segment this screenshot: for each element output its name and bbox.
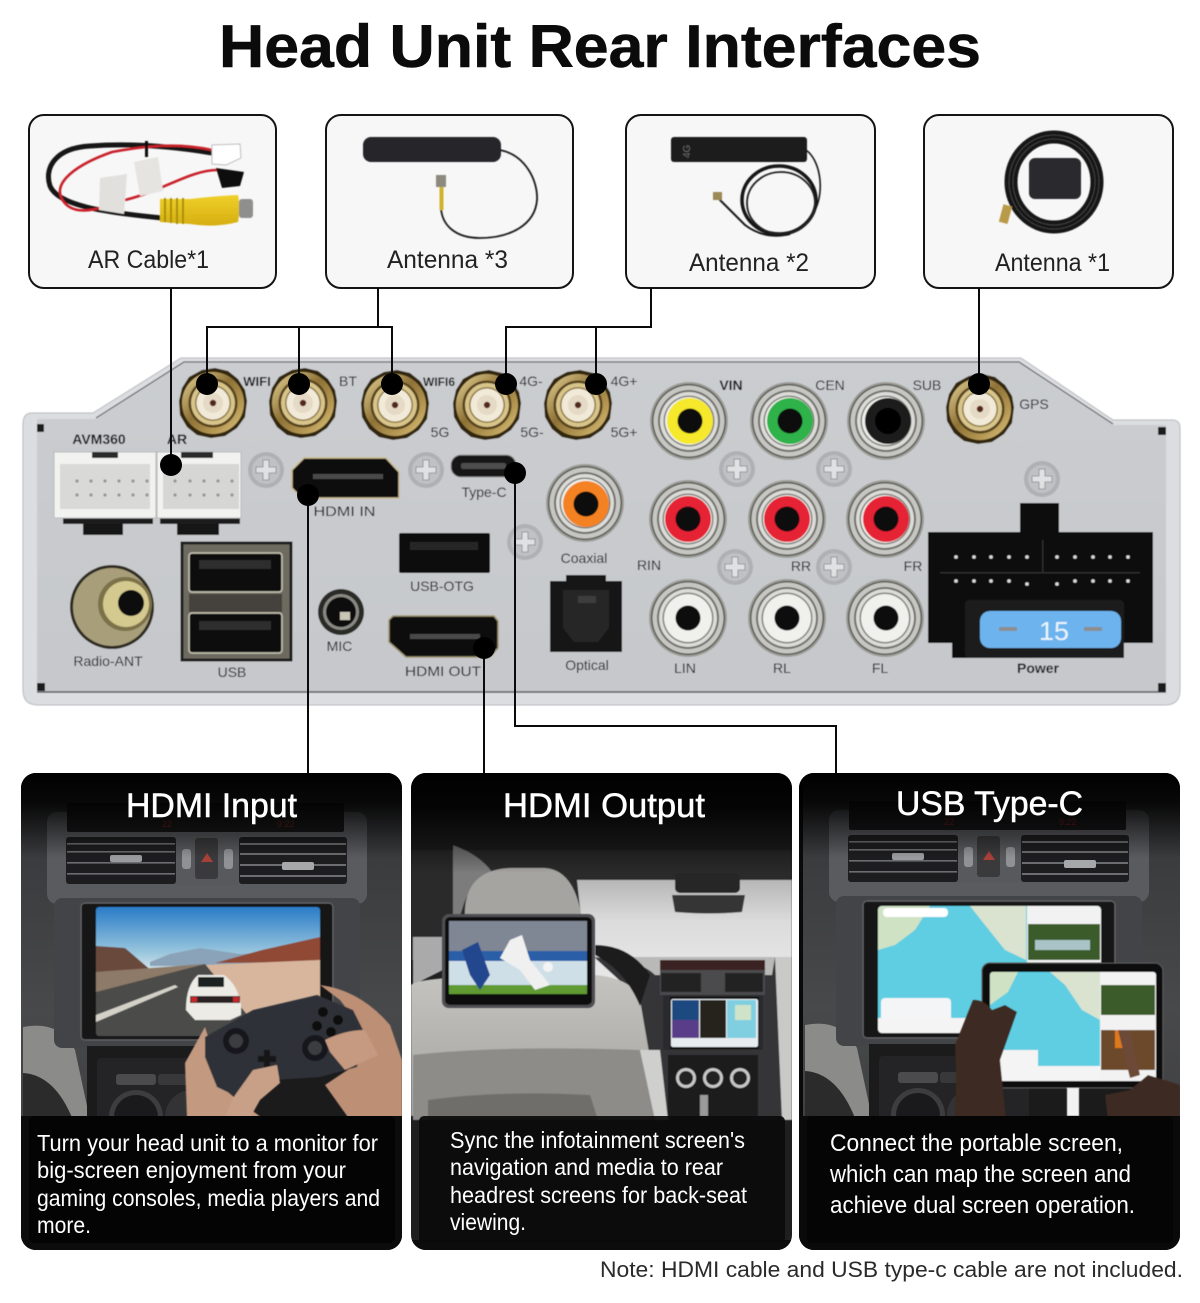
RCA labels: LIN — [674, 660, 696, 676]
port labels top row: WIFI — [243, 374, 271, 389]
RCA labels: FR — [904, 558, 922, 574]
screws — [248, 451, 1060, 585]
caption: Turn your head unit to a monitor for — [37, 1130, 378, 1156]
port labels top row — [72, 373, 1049, 447]
caption: big-screen enjoyment from your — [37, 1157, 346, 1183]
port labels top row: CEN — [815, 377, 845, 393]
head unit screen with map — [863, 901, 1115, 1038]
connection dots — [160, 373, 990, 659]
power connector with fuse: 15 — [1039, 616, 1069, 646]
antenna 2 photo — [671, 137, 820, 236]
HDMI OUT port — [389, 616, 498, 679]
headrest tablet with soccer match — [442, 914, 595, 1008]
caption: which can map the screen and — [829, 1161, 1131, 1188]
port labels top row: VIN — [719, 377, 743, 393]
panel: USB Type-C — [799, 771, 1184, 1250]
card: antenna 3 — [326, 115, 573, 288]
caption — [29, 1116, 395, 1243]
MIC jack — [318, 589, 364, 654]
port labels top row: BT — [339, 373, 357, 389]
antenna 2 label: Antenna *2 — [689, 249, 809, 277]
RCA labels: RL — [773, 660, 791, 676]
line: AR cable to AR port — [170, 288, 172, 465]
antenna 1 label: Antenna *1 — [995, 249, 1110, 277]
RCA labels: RR — [791, 558, 811, 574]
USB Type-C heading: USB Type-C — [896, 785, 1083, 823]
caption: viewing. — [450, 1209, 526, 1235]
HDMI IN port: HDMI IN — [314, 503, 376, 519]
RCA labels: FL — [872, 660, 888, 676]
line: Type-C to panel — [515, 473, 836, 773]
top fade — [799, 773, 1180, 858]
line: antenna 3 to WIFI BT WIFI6 — [207, 288, 392, 384]
card: AR cable — [29, 115, 276, 288]
AVM360 and AR connectors — [54, 452, 241, 535]
port labels top row: AVM360 — [72, 431, 126, 447]
HDMI IN port — [292, 458, 399, 519]
caption: Connect the portable screen, — [830, 1130, 1123, 1157]
line: antenna 1 to GPS — [978, 288, 980, 384]
port labels top row: AR — [167, 431, 187, 447]
Type-C port: Type-C — [461, 484, 507, 500]
head unit screen with racing game — [81, 903, 333, 1040]
port labels top row: GPS — [1019, 396, 1049, 412]
optical port — [550, 575, 622, 673]
caption: more. — [37, 1212, 91, 1238]
connector lines and dots — [160, 288, 990, 773]
USB-OTG port: USB-OTG — [410, 578, 474, 594]
caption: headrest screens for back-seat — [450, 1182, 748, 1208]
port labels top row: 5G- — [520, 424, 544, 440]
note: Note: HDMI cable and USB type-c cable are not included. — [600, 1257, 1183, 1282]
RCA labels — [637, 557, 922, 676]
USB double port: USB — [218, 664, 246, 680]
antenna 3 label: Antenna *3 — [387, 246, 508, 274]
AR cable photo — [48, 141, 253, 226]
AR cable label: AR Cable*1 — [88, 246, 209, 274]
rear-seat car interior — [411, 845, 792, 1120]
caption: gaming consoles, media players and — [37, 1185, 380, 1211]
caption: navigation and media to rear — [450, 1154, 723, 1180]
optical port: Optical — [565, 657, 609, 673]
caption — [807, 1116, 1173, 1243]
HDMI OUT port: HDMI OUT — [405, 663, 481, 679]
power connector with fuse: Power — [1017, 660, 1060, 676]
Radio-ANT socket: Radio-ANT — [73, 653, 143, 669]
port labels top row: 4G- — [519, 373, 543, 389]
caption — [419, 1116, 785, 1243]
antenna 2 photo: 4G — [682, 144, 693, 158]
port labels top row: 5G — [431, 424, 449, 440]
GPS antenna photo — [999, 135, 1099, 229]
chassis outer frame — [23, 358, 1180, 705]
Radio-ANT socket — [70, 565, 154, 669]
top fade — [21, 773, 402, 858]
hand and portable screen — [955, 963, 1180, 1120]
USB-OTG port — [399, 533, 490, 594]
MIC jack: MIC — [327, 638, 352, 654]
coaxial jack — [546, 464, 624, 566]
power connector with fuse — [928, 503, 1153, 676]
port labels top row: 5G+ — [611, 424, 637, 440]
coaxial jack: Coaxial — [561, 550, 607, 566]
card: antenna 2 — [626, 115, 875, 288]
caption: Sync the infotainment screen's — [450, 1127, 745, 1153]
port labels top row: SUB — [913, 377, 941, 393]
RCA jacks block — [649, 382, 925, 657]
line: HDMI IN to panel — [307, 495, 309, 773]
panel: HDMI output — [411, 773, 792, 1250]
hands holding game controller — [185, 985, 402, 1120]
HDMI input heading: HDMI Input — [126, 787, 298, 825]
caption: achieve dual screen operation. — [830, 1192, 1135, 1219]
title: Head Unit Rear Interfaces — [219, 13, 981, 80]
top fade — [411, 773, 792, 873]
line: antenna 2 to 4G ports — [506, 288, 651, 384]
port labels top row: 4G+ — [611, 373, 637, 389]
RCA labels: RIN — [637, 557, 661, 573]
port labels top row: WIFI6 — [423, 375, 455, 389]
panel: HDMI input — [21, 773, 402, 1250]
HDMI output heading: HDMI Output — [503, 787, 706, 825]
SMA connectors row — [179, 368, 1014, 444]
line: HDMI OUT to panel — [483, 648, 485, 773]
card: antenna 1 — [924, 115, 1173, 288]
Type-C port — [451, 455, 516, 500]
panel: rear chassis — [23, 358, 1180, 705]
USB double port — [182, 543, 291, 680]
antenna 3 photo — [363, 137, 537, 238]
